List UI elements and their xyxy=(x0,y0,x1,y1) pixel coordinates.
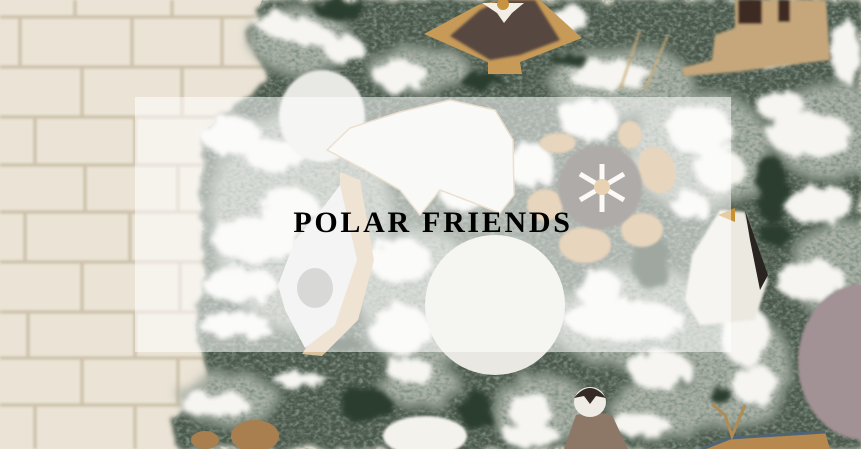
ornament: white wooden polar bear xyxy=(327,100,514,215)
dark needle gaps xyxy=(314,0,791,430)
ornament: bear bauble on ribbon xyxy=(278,172,374,356)
ornament: mauve pompom xyxy=(798,284,861,440)
ornament: small wooden snowflake bottom left xyxy=(191,420,279,449)
ornament: white glitter ball xyxy=(425,235,565,375)
ornament: white pompom bottom xyxy=(383,416,467,449)
ornament: wooden fur tree xyxy=(424,0,582,74)
title: POLAR FRIENDS xyxy=(293,206,573,238)
ornament: bottle-brush boots xyxy=(612,0,830,90)
translucent white overlay panel xyxy=(135,97,731,352)
flocked snow branches xyxy=(181,6,860,447)
grey-green mid layer of frosted needles xyxy=(180,6,861,445)
ornament: small penguin xyxy=(564,387,628,449)
ornament: white bauble top xyxy=(279,70,365,162)
ornament: wooden plaque bottom right xyxy=(702,404,830,449)
ornament: white bird xyxy=(685,208,768,325)
ornament: fur snowflake xyxy=(527,121,682,263)
